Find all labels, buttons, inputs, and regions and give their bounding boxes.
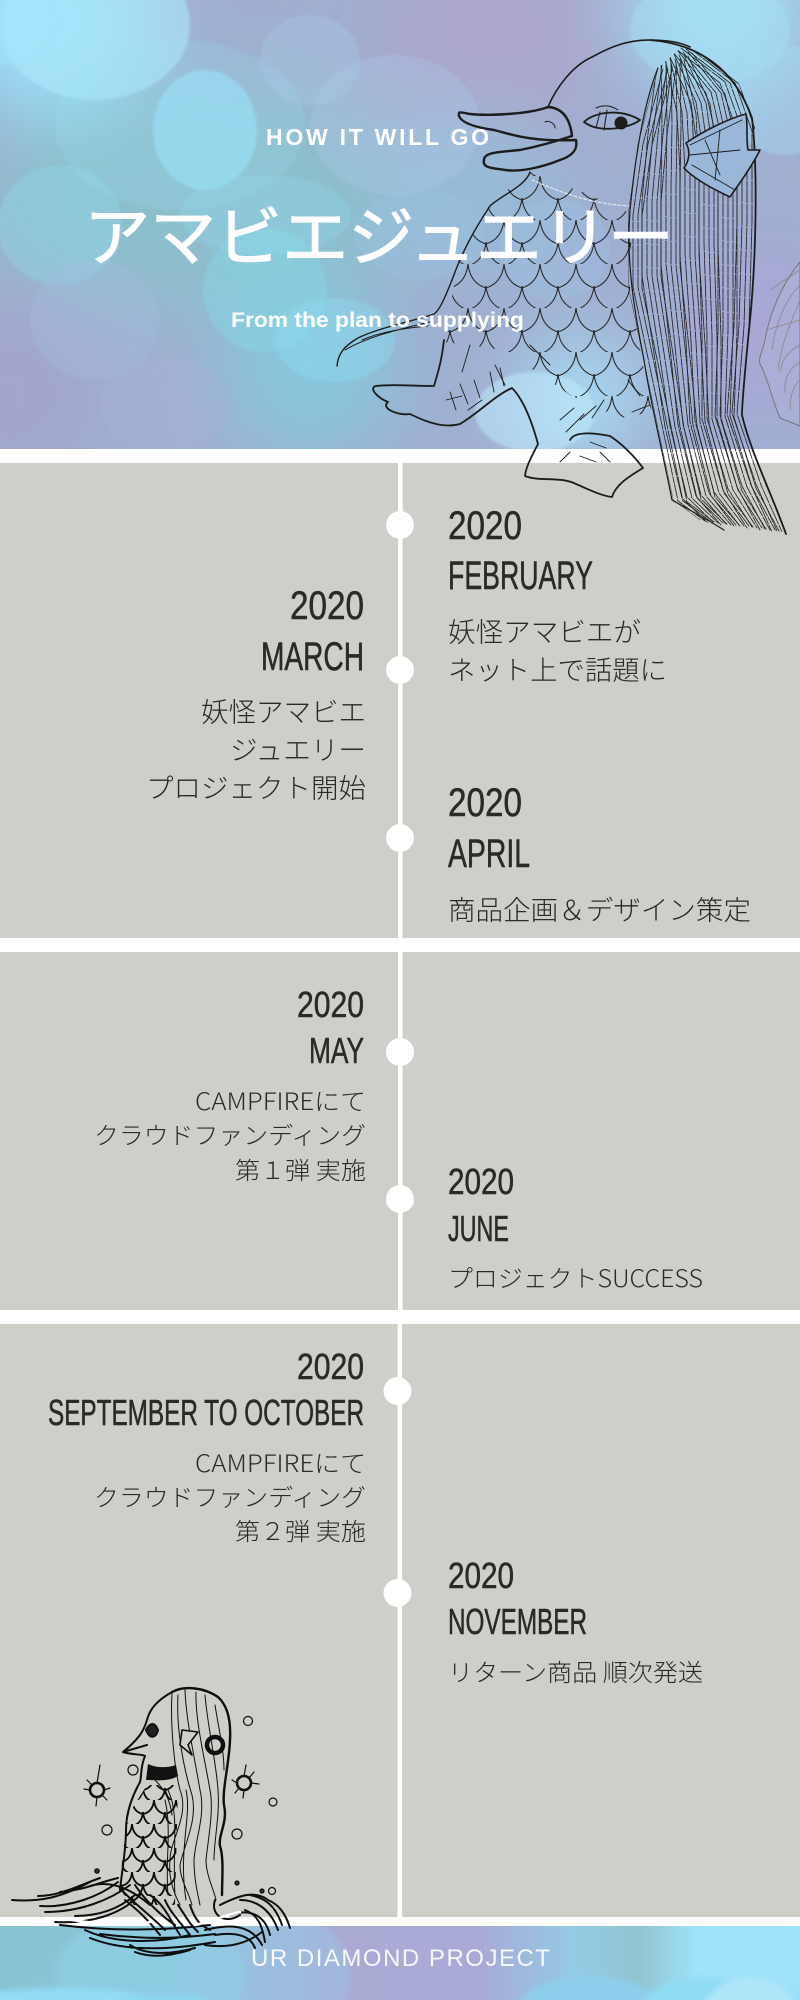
header subtitle: how it will go: HOW IT WILL GO [266,124,489,150]
white band under header [0,449,800,463]
amabie legs and feet [373,340,643,497]
entry: April 2020 [448,781,751,928]
entry: May 2020: 2020 [297,984,364,1025]
amabie body outline and tail [337,172,530,366]
entry: November 2020: 2020 [448,1555,514,1596]
entry: March 2020: 2020 [290,584,364,628]
small amabie waves [12,1878,290,1956]
panel: timeline section 2 [0,952,800,1310]
entry: May 2020: 第１弾 実施 [235,1151,366,1186]
amabie ear fin [684,114,760,197]
footer text: UR DIAMOND PROJECT [251,1945,550,1972]
entry: February 2020: 妖怪アマビエが [448,611,641,650]
entry: March 2020: 妖怪アマビエ [201,691,366,730]
second creature at right edge [760,262,800,426]
entry: September to October 2020: CAMPFIREにて [195,1444,366,1479]
entry: March 2020 [146,584,366,806]
header bokeh background [0,0,800,480]
amabie hair [623,48,791,533]
amabie beak [459,107,576,171]
entry: June 2020: プロジェクトSUCCESS [448,1259,703,1294]
entry: May 2020: CAMPFIREにて [195,1082,366,1117]
small amabie ear fin [180,1730,198,1755]
entry: February 2020: ネット上で話題に [448,649,667,688]
entry: February 2020: 2020 [448,504,522,548]
entry: September to October 2020: 第２弾 実施 [235,1512,366,1547]
entry: February 2020 [448,504,667,688]
entry: May 2020 [94,984,366,1186]
entry: March 2020: プロジェクト開始 [146,767,366,806]
footer bokeh background [0,1926,800,2000]
small amabie scales [118,1785,180,1905]
entry: March 2020: ジュエリー [230,729,366,768]
entry: June 2020: JUNE [448,1208,509,1249]
entry: February 2020: FEBRUARY [448,554,593,598]
entry: April 2020: 2020 [448,781,522,825]
small amabie head and body outline [120,1692,172,1890]
entry: November 2020: NOVEMBER [448,1601,587,1642]
timeline dots [384,511,414,1607]
amabie head outline [548,40,690,107]
entry: September to October 2020 [48,1346,366,1547]
small amabie eye [146,1724,158,1737]
header tagline: From the plan to supplying [231,309,524,332]
panel: timeline section 1 [0,463,800,938]
entry: April 2020: APRIL [448,832,530,876]
title: アマビエジュエリー [84,185,674,279]
amabie body scales [446,172,652,418]
entry: April 2020: 商品企画＆デザイン策定 [448,889,751,928]
entry: September to October 2020: SEPTEMBER TO OCTOBER [48,1392,364,1433]
entry: May 2020: MAY [309,1030,364,1071]
entry: September to October 2020: クラウドファンディング [94,1478,366,1513]
entry: June 2020: 2020 [448,1161,514,1202]
panel: timeline section 3 [0,1324,800,1917]
small amabie hair [172,1688,230,1895]
entry: March 2020: MARCH [261,635,364,679]
entry: September to October 2020: 2020 [297,1346,364,1387]
timeline vertical line [398,463,403,1917]
small amabie neck shadow [146,1764,178,1780]
entry: June 2020 [448,1161,703,1294]
amabie eye [584,113,640,129]
small amabie bubbles [84,1716,277,1894]
entry: November 2020: リターン商品 順次発送 [448,1653,703,1688]
entry: May 2020: クラウドファンディング [94,1116,366,1151]
illustration: large amabie [337,40,800,534]
entry: November 2020 [448,1555,703,1688]
illustration: small amabie [12,1688,290,1956]
